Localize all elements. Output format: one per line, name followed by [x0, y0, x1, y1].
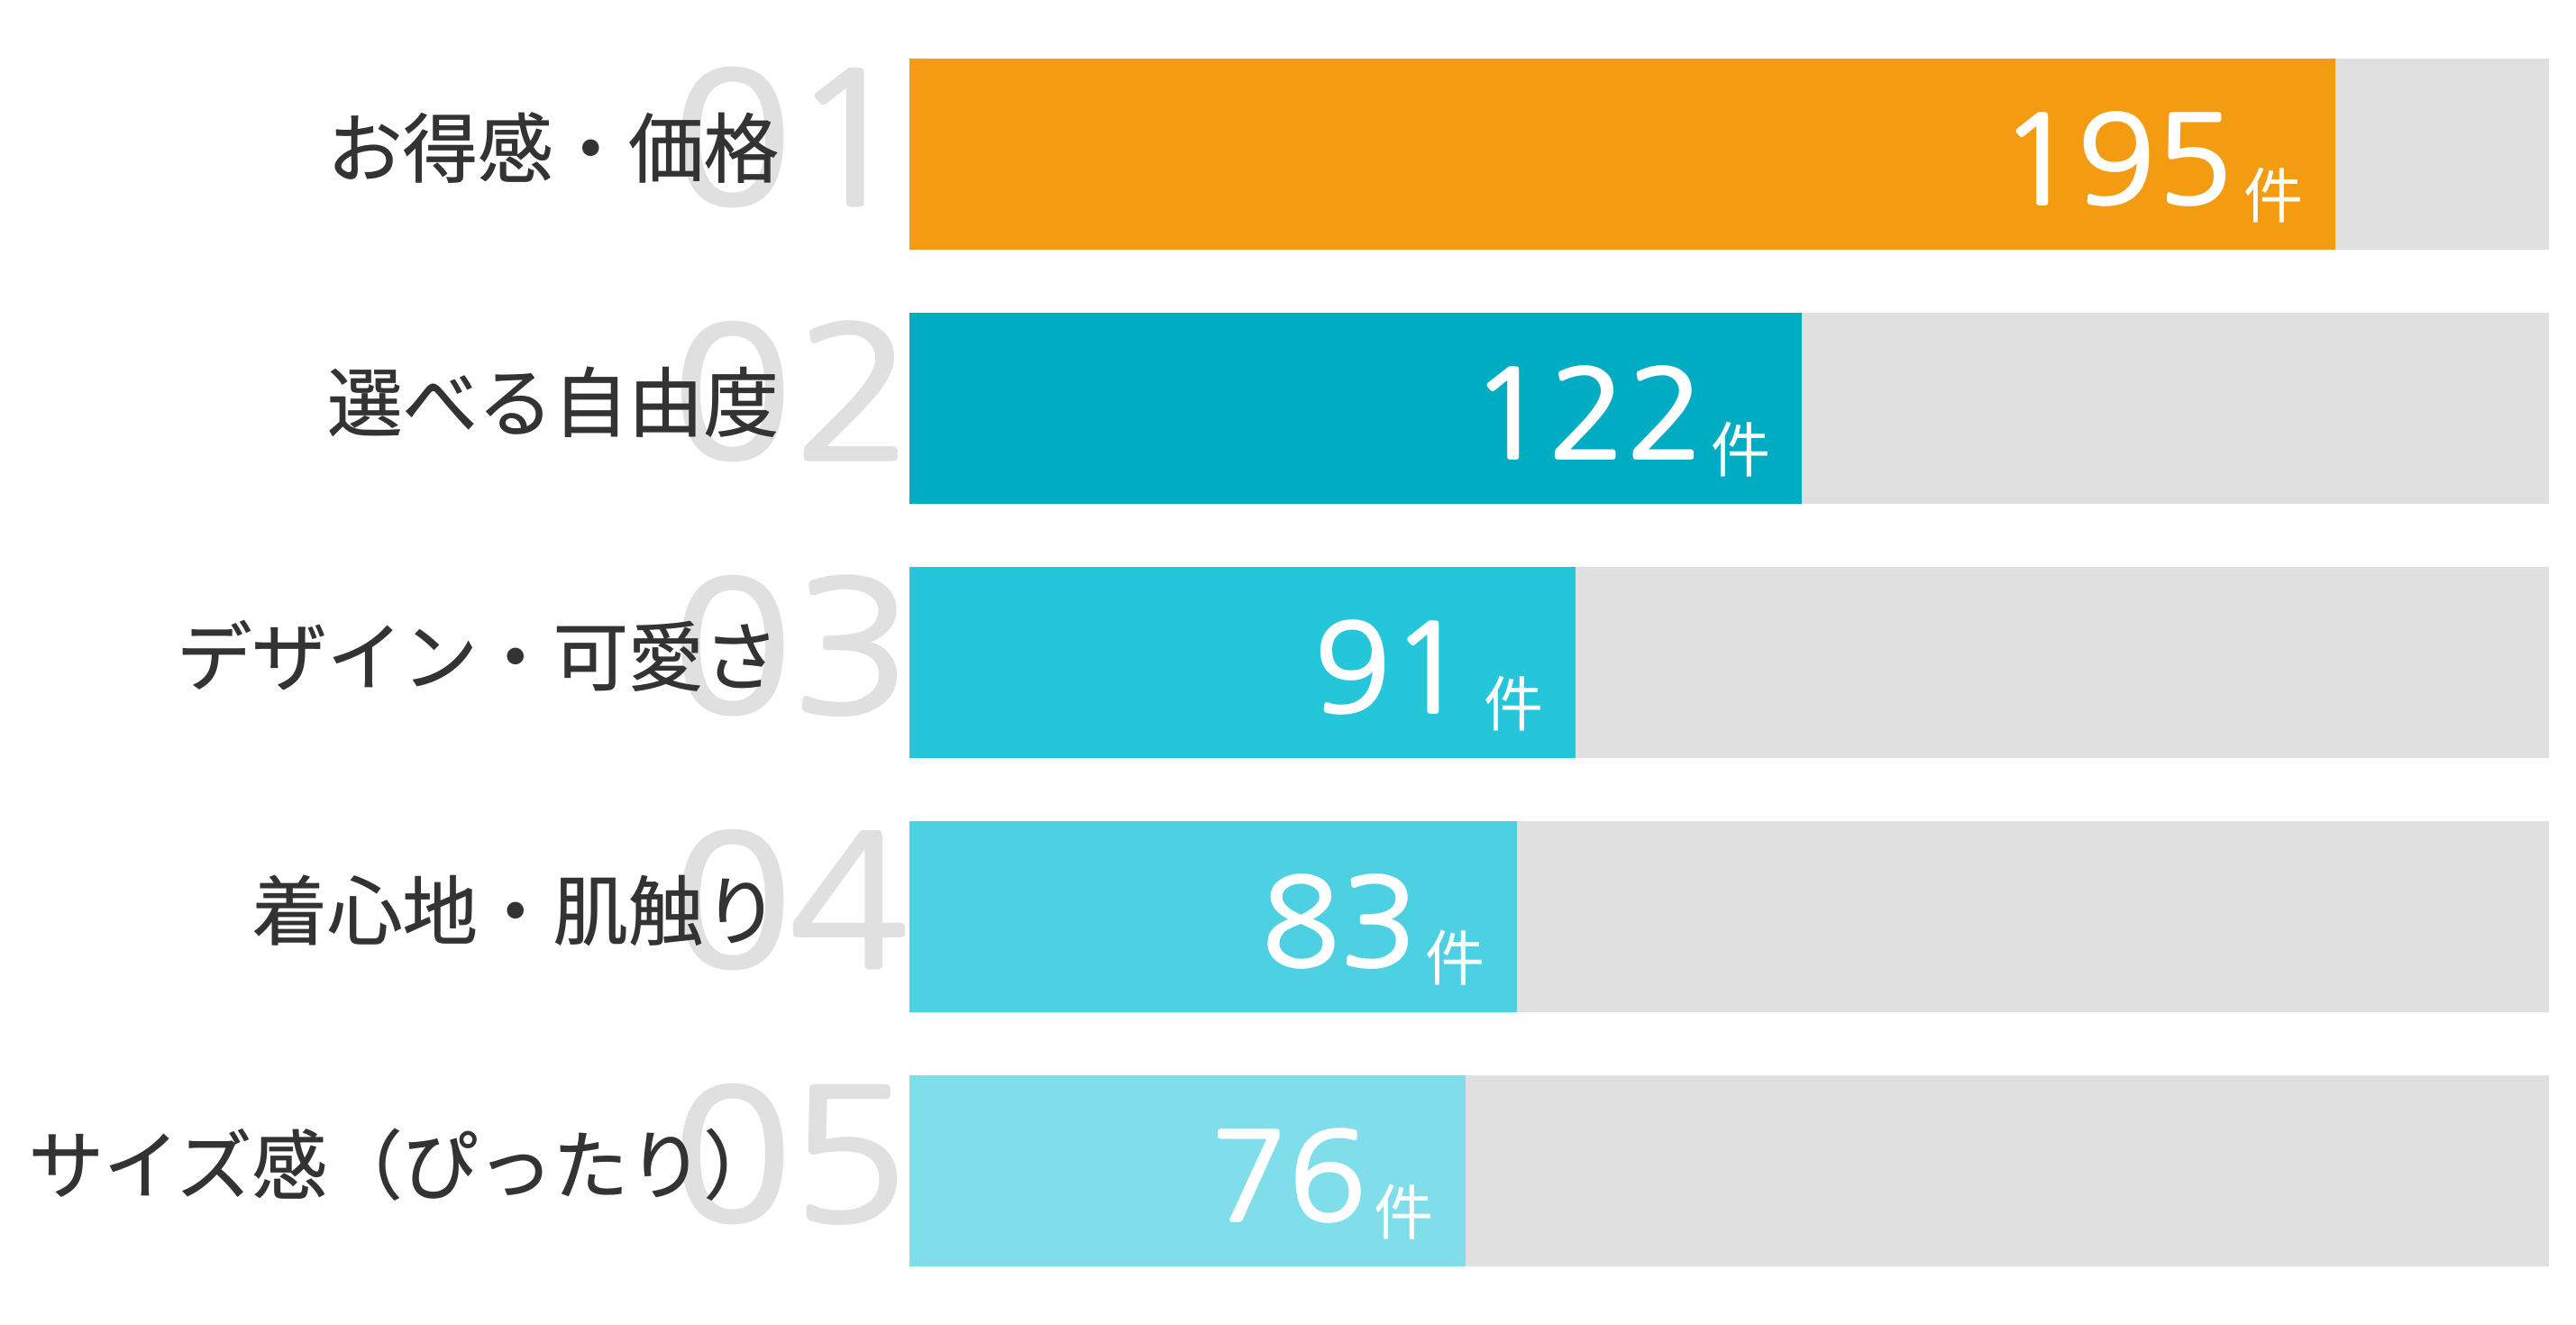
rank number 01: 01	[671, 49, 909, 231]
bar track	[909, 313, 2549, 504]
value 91: 91	[1314, 608, 1467, 730]
row 4: 着心地・肌触り	[252, 811, 2549, 1012]
label: お得感・価格	[327, 108, 779, 193]
rank number 03: 03	[671, 557, 912, 739]
row 1: お得感・価格	[327, 49, 2549, 250]
unit: 件	[1425, 926, 1484, 992]
bar value	[909, 59, 2335, 250]
bar track	[909, 1075, 2549, 1266]
value 76: 76	[1210, 1117, 1366, 1238]
unit: 件	[1374, 1180, 1433, 1247]
bar track	[909, 567, 2549, 758]
bar track	[909, 59, 2549, 250]
value 83: 83	[1262, 863, 1418, 984]
row 2: 選べる自由度	[327, 303, 2549, 504]
bar value	[909, 313, 1802, 504]
row 5: サイズ感（ぴったり）	[29, 1065, 2549, 1266]
rank number 02: 02	[671, 303, 915, 485]
unit: 件	[1711, 417, 1770, 484]
label: 着心地・肌触り	[252, 871, 779, 955]
label: サイズ感（ぴったり）	[29, 1125, 779, 1210]
unit: 件	[1484, 672, 1543, 738]
unit: 件	[2243, 163, 2303, 230]
label: デザイン・可愛さ	[177, 617, 779, 701]
rank number 04: 04	[671, 811, 909, 993]
bar track	[909, 821, 2549, 1012]
bar value	[909, 821, 1517, 1012]
rank number 05: 05	[671, 1065, 909, 1247]
value 195: 195	[1999, 100, 2233, 222]
value 122: 122	[1470, 354, 1704, 476]
bar value	[909, 1075, 1466, 1266]
bar value	[909, 567, 1576, 758]
row 3: デザイン・可愛さ	[177, 557, 2549, 758]
label: 選べる自由度	[327, 362, 779, 447]
